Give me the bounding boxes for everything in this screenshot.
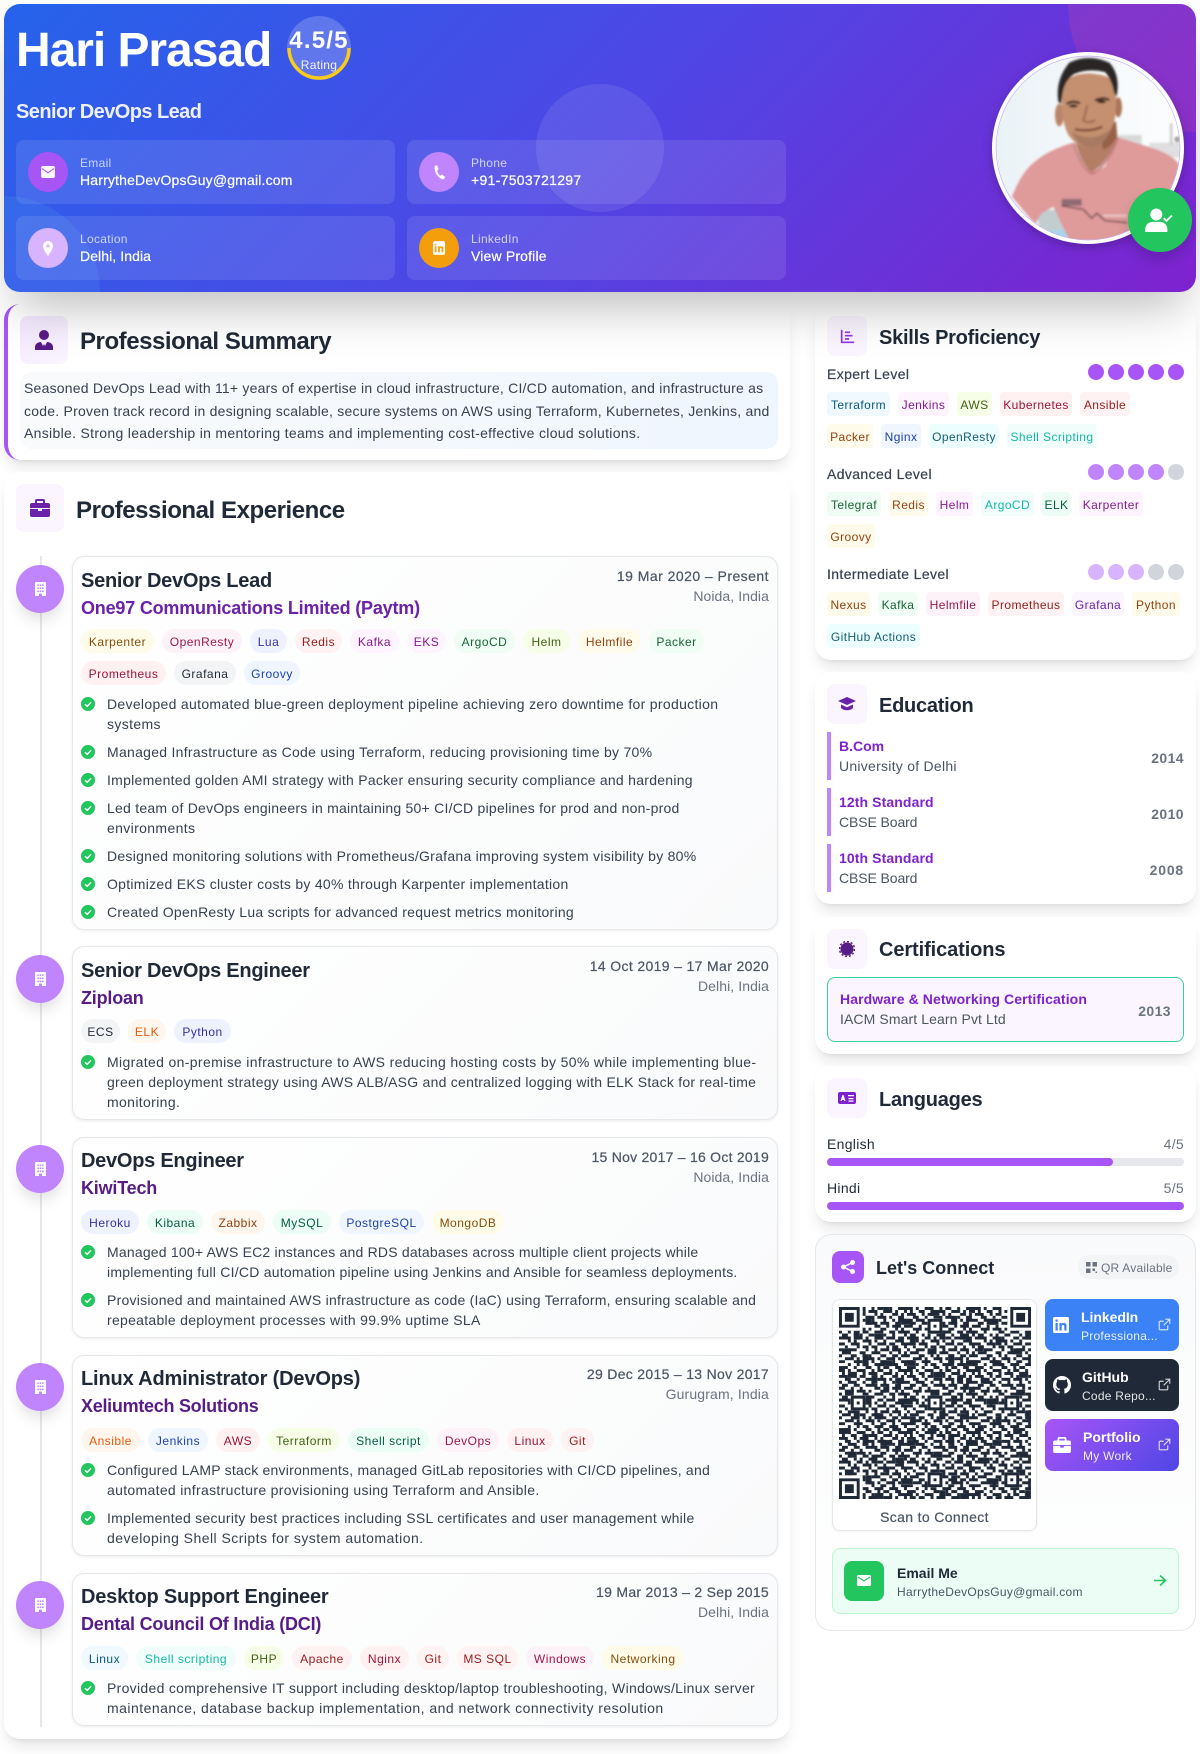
timeline node 4 [16, 1363, 64, 1411]
bullet [81, 876, 569, 892]
panel: professional experience [4, 472, 790, 1739]
tags row: AWS [960, 398, 989, 412]
icon: external link [1158, 1378, 1171, 1391]
email text: HarrytheDevOpsGuy@gmail.com [80, 172, 293, 188]
tags row: Python [1136, 598, 1176, 612]
heading: Education [879, 695, 973, 717]
tags row: Kafka [882, 598, 914, 612]
rating badge: Rating [301, 58, 337, 72]
location: Gurugram, India [666, 1386, 769, 1402]
tags row: OpenResty [170, 635, 234, 649]
location text [80, 232, 151, 264]
achievements: systems [107, 716, 161, 732]
bullet [81, 696, 718, 732]
qr code [839, 1307, 1031, 1499]
job card: Senior DevOps Engineer [72, 946, 778, 1120]
icon: external link [1158, 1318, 1171, 1331]
achievements: Designed monitoring solutions with Prometheus/Grafana improving system visibility by 80% [107, 848, 696, 864]
header banner [4, 4, 1196, 292]
tags row 2 [827, 424, 1097, 448]
tags row: Apache [300, 1652, 344, 1666]
school: CBSE Board [839, 870, 917, 886]
tags row: Packer [656, 635, 697, 649]
tags row: Linux [89, 1652, 120, 1666]
email text: Email [80, 156, 112, 170]
rating badge [287, 16, 351, 80]
tags row: Git [569, 1434, 586, 1448]
verified badge [1128, 188, 1192, 252]
tags row: Terraform [276, 1434, 332, 1448]
job card: DevOps Engineer: Managed 100+ AWS EC2 instances and RDS databases across multiple client projects while [107, 1244, 698, 1260]
qr code card [832, 1299, 1037, 1531]
tags row: PHP [251, 1652, 277, 1666]
qr available chip: QR Available [1101, 1261, 1173, 1275]
tags row: Jenkins [156, 1434, 200, 1448]
profile photo [988, 51, 1188, 252]
bullet [81, 1244, 738, 1280]
tags row 2: Groovy [251, 667, 293, 681]
year: 2013 [1138, 1003, 1171, 1019]
email me button [832, 1548, 1179, 1614]
icon: linkedin [419, 228, 459, 268]
tags row: Ansible [89, 1434, 132, 1448]
icon: briefcase [16, 484, 64, 532]
linkedin text [471, 232, 547, 264]
timeline node 2 [16, 955, 64, 1003]
tags row [81, 1210, 504, 1234]
role: Linux Administrator (DevOps) [81, 1368, 360, 1390]
link subtext: Professiona... [1081, 1329, 1158, 1343]
job card: Linux Administrator: Configured LAMP stack environments, managed GitLab repositories with CI/CD pipelines, and [107, 1462, 710, 1478]
tags row: EKS [414, 635, 439, 649]
issuer: IACM Smart Learn Pvt Ltd [840, 1011, 1006, 1027]
location: Noida, India [693, 1169, 769, 1185]
link subtext: Code Repo... [1082, 1389, 1156, 1403]
tags row: ArgoCD [985, 498, 1030, 512]
score: 4/5 [1164, 1136, 1184, 1152]
summary text: Ansible. Strong leadership in mentoring teams and implementing cost-effective cloud solutions. [24, 425, 640, 441]
link button: GitHub [1045, 1359, 1179, 1411]
bullet [81, 1292, 756, 1328]
education: 10th [827, 844, 1184, 892]
panel: education [815, 672, 1196, 904]
company: Ziploan [81, 988, 144, 1008]
tags row [827, 592, 1180, 616]
degree: 10th Standard [839, 850, 934, 866]
heading: Skills Proficiency [879, 327, 1040, 349]
job card: DevOps Engineer [72, 1137, 778, 1338]
icon: person [20, 316, 68, 364]
tags row: Shell script [356, 1434, 421, 1448]
summary text [20, 372, 778, 449]
tags row [827, 492, 1143, 516]
bullet [81, 848, 696, 864]
bullet [81, 772, 693, 788]
dates: 14 Oct 2019 – 17 Mar 2020 [590, 958, 769, 974]
tags row: Telegraf [831, 498, 877, 512]
tags row: Heroku [89, 1216, 131, 1230]
language: Hindi [827, 1180, 1184, 1210]
heading: Certifications [879, 939, 1005, 961]
dates: 29 Dec 2015 – 13 Nov 2017 [587, 1366, 769, 1382]
tags row: MySQL [281, 1216, 323, 1230]
tags row: Terraform [831, 398, 886, 412]
heading: Let's Connect [876, 1258, 994, 1278]
qr caption: Scan to Connect [880, 1509, 989, 1525]
job card: Desktop Support Engineer: maintenance, database backup implementation, and network connectivity resolution [107, 1700, 664, 1716]
bullet [81, 904, 574, 920]
name: Hari Prasad [16, 24, 271, 77]
icon: linkedin [1053, 1317, 1069, 1333]
tags row 2: Grafana [182, 667, 228, 681]
level dots [1088, 464, 1184, 480]
heading: Professional Summary [80, 328, 331, 355]
timeline node 1 [16, 565, 64, 613]
level label: Advanced Level [827, 466, 932, 482]
phone text: +91-7503721297 [471, 172, 581, 188]
icon: language [827, 1078, 867, 1118]
tags row: PostgreSQL [346, 1216, 417, 1230]
achievements [81, 696, 718, 920]
tags row: Kubernetes [1003, 398, 1069, 412]
icon: bar chart [827, 316, 867, 356]
year: 2008 [1150, 862, 1184, 878]
achievements: Implemented golden AMI strategy with Packer ensuring security compliance and hardening [107, 772, 693, 788]
job card: DevOps Engineer: Provisioned and maintained AWS infrastructure as code (IaC) using Terraform, ensuring scalable and [107, 1292, 756, 1308]
year: 2010 [1151, 806, 1184, 822]
achievements: Optimized EKS cluster costs by 40% through Karpenter implementation [107, 876, 569, 892]
location: Noida, India [693, 588, 769, 604]
tags row: Jenkins [902, 398, 945, 412]
skill level: advanced [826, 464, 1184, 548]
link text: GitHub [1082, 1369, 1129, 1385]
job card: Senior DevOps Engineer: monitoring. [107, 1094, 180, 1110]
contact: linkedin [407, 216, 786, 280]
heading: experience [16, 484, 345, 532]
tags row: Git [425, 1652, 441, 1666]
tags row: Networking [610, 1652, 676, 1666]
skill level: expert [827, 364, 1184, 448]
tags row: Helm [531, 635, 562, 649]
role: Senior DevOps Lead [81, 570, 272, 592]
job card: Linux Administrator: developing Shell Scripts for system automation. [107, 1530, 424, 1546]
role: DevOps Engineer [81, 1150, 244, 1172]
icon: map pin [28, 228, 68, 268]
contact: phone [407, 140, 786, 204]
summary text: code. Proven track record in designing scalable, secure systems on AWS using Terraform, Kubernetes, Jenkins, and [24, 402, 770, 418]
achievements: Managed Infrastructure as Code using Terraform, reducing provisioning time by 70% [107, 744, 652, 760]
label: Email Me [897, 1565, 958, 1581]
bullet [81, 1054, 756, 1110]
name: English [827, 1136, 875, 1152]
tags row [827, 392, 1130, 416]
heading: Languages [879, 1089, 982, 1111]
education: 12th [827, 788, 1184, 836]
tags row [81, 1428, 594, 1452]
panel: professional summary [4, 304, 790, 460]
tags row 2: Nginx [885, 430, 917, 444]
icon: external link [1158, 1438, 1171, 1451]
tags row [81, 629, 704, 653]
location: Delhi, India [698, 978, 769, 994]
certificate card [827, 977, 1184, 1042]
tags row: Helmfile [586, 635, 633, 649]
year: 2014 [1151, 750, 1184, 766]
cert name: Hardware & Networking Certification [840, 991, 1087, 1007]
tags row: MS SQL [463, 1652, 512, 1666]
job card: Linux Administrator: automated infrastructure provisioning using Terraform and Ansible. [107, 1482, 540, 1498]
dates: 15 Nov 2017 – 16 Oct 2019 [592, 1149, 769, 1165]
achievements: Developed automated blue-green deployment pipeline achieving zero downtime for production [107, 696, 718, 712]
icon: graduation cap [827, 684, 867, 724]
job card: DevOps Engineer: implementing full CI/CD automation pipeline using Jenkins and Ansible for seamless deployments. [107, 1264, 738, 1280]
level dots [1088, 364, 1184, 380]
icon: briefcase [1053, 1437, 1071, 1453]
tags row: Shell scripting [145, 1652, 227, 1666]
contact: email [16, 140, 395, 204]
name: Hindi [827, 1180, 860, 1196]
timeline node 5 [16, 1581, 64, 1629]
school: CBSE Board [839, 814, 917, 830]
level bar [827, 1202, 1184, 1210]
level bar [827, 1158, 1184, 1166]
tags row: Linux [514, 1434, 546, 1448]
tags row [81, 1019, 231, 1043]
achievements: environments [107, 820, 195, 836]
panel: certifications [815, 917, 1196, 1054]
tags row: ELK [135, 1025, 159, 1039]
job card: Desktop Support Engineer: Provided comprehensive IT support including desktop/laptop troubleshooting, Windows/Linux server [107, 1680, 755, 1696]
tags row [81, 1646, 684, 1670]
score: 5/5 [1164, 1180, 1184, 1196]
arrow [1153, 1574, 1167, 1587]
panel: skills proficiency [815, 304, 1196, 660]
job headline: Senior DevOps Lead [16, 101, 201, 123]
link text: Portfolio [1083, 1429, 1141, 1445]
linkedin text: LinkedIn [471, 232, 519, 246]
bullet [81, 800, 680, 836]
tags row: Karpenter [1083, 498, 1139, 512]
tags row: MongoDB [440, 1216, 496, 1230]
tags row 2: OpenResty [932, 430, 996, 444]
dates: 19 Mar 2013 – 2 Sep 2015 [596, 1584, 769, 1600]
job card: Desktop Support Engineer [72, 1573, 778, 1726]
panel: let's connect [815, 1234, 1196, 1631]
skill level: intermediate [827, 564, 1184, 648]
tags row: Grafana [1075, 598, 1121, 612]
tags row 2: Shell Scripting [1010, 430, 1094, 444]
tags row: Kafka [358, 635, 391, 649]
language: English [827, 1136, 1184, 1166]
tags row: Python [182, 1025, 223, 1039]
bullet [81, 744, 652, 760]
tags row: Nexus [830, 598, 867, 612]
panel: languages [815, 1066, 1196, 1222]
tags row: Zabbix [218, 1216, 258, 1230]
icon: github [1053, 1376, 1071, 1394]
summary text: Seasoned DevOps Lead with 11+ years of expertise in cloud infrastructure, CI/CD automation, and infrastructure as [24, 380, 763, 396]
tags row: Ansible [1084, 398, 1126, 412]
link button: LinkedIn [1045, 1299, 1179, 1351]
location text: Location [80, 232, 128, 246]
job card: Senior DevOps Engineer: green deployment strategy using AWS ALB/ASG and centralized logging with ELK Stack for real-time [107, 1074, 756, 1090]
level label: Expert Level [827, 366, 909, 382]
level label: Intermediate Level [827, 566, 949, 582]
address: HarrytheDevOpsGuy@gmail.com [897, 1585, 1083, 1599]
location: Delhi, India [698, 1604, 769, 1620]
degree: B.Com [839, 738, 884, 754]
level dots [1088, 564, 1184, 580]
tags row: Prometheus [992, 598, 1060, 612]
tags row: DevOps [445, 1434, 491, 1448]
role: Desktop Support Engineer [81, 1586, 328, 1608]
bullet [81, 1510, 695, 1546]
tags row: Helmfile [930, 598, 976, 612]
tags row: Helm [940, 498, 969, 512]
link text: LinkedIn [1081, 1309, 1138, 1325]
company: KiwiTech [81, 1178, 157, 1198]
icon: share [832, 1251, 864, 1283]
achievements: Led team of DevOps engineers in maintaining 50+ CI/CD pipelines for prod and non-prod [107, 800, 680, 816]
link subtext: My Work [1083, 1449, 1132, 1463]
company: One97 Communications Limited (Paytm) [81, 598, 420, 618]
email text [80, 156, 293, 188]
tags row 2: Prometheus [89, 667, 158, 681]
icon: badge [827, 929, 867, 969]
tags row: Nginx [368, 1652, 401, 1666]
location text: Delhi, India [80, 248, 151, 264]
tags row 2: Packer [830, 430, 870, 444]
dates: 19 Mar 2020 – Present [617, 568, 769, 584]
bullet [81, 1462, 710, 1498]
icon: envelope [844, 1561, 884, 1601]
degree: 12th Standard [839, 794, 934, 810]
phone text [471, 156, 581, 188]
tags row 2: Groovy [830, 530, 872, 544]
tags row: Kibana [155, 1216, 195, 1230]
education: B.Com [827, 732, 1184, 780]
tags row: ECS [87, 1025, 114, 1039]
link button: Portfolio [1045, 1419, 1179, 1471]
icon: phone [419, 152, 459, 192]
job card: Linux Administrator: Implemented security best practices including SSL certificates and user management while [107, 1510, 695, 1526]
tags row: Windows [534, 1652, 586, 1666]
role: Senior DevOps Engineer [81, 960, 310, 982]
tags row 2: GitHub Actions [831, 630, 916, 644]
tags row: Redis [302, 635, 335, 649]
linkedin text: View Profile [471, 248, 547, 264]
company: Dental Council Of India (DCI) [81, 1614, 321, 1634]
job card: Linux Administrator [72, 1355, 778, 1556]
tags row: Lua [258, 635, 279, 649]
icon: envelope [28, 152, 68, 192]
phone text: Phone [471, 156, 507, 170]
tags row: Redis [892, 498, 925, 512]
bullet [81, 1680, 755, 1716]
tags row: ELK [1045, 498, 1068, 512]
contact: location [16, 216, 395, 280]
job card: DevOps Engineer: repeatable deployment processes with 99.9% uptime SLA [107, 1312, 481, 1328]
company: Xeliumtech Solutions [81, 1396, 258, 1416]
tags row: AWS [224, 1434, 252, 1448]
job card: Senior DevOps Engineer: Migrated on-premise infrastructure to AWS reducing hosting costs by 50% while implementing blue- [107, 1054, 756, 1070]
achievements: Created OpenResty Lua scripts for advanced request metrics monitoring [107, 904, 574, 920]
timeline line [40, 556, 42, 1727]
school: University of Delhi [839, 758, 957, 774]
tags row: ArgoCD [462, 635, 507, 649]
title: Professional Experience [76, 497, 345, 524]
tags row 2 [81, 661, 300, 685]
job card: Senior DevOps Lead [72, 556, 778, 930]
timeline node 3 [16, 1145, 64, 1193]
rating badge: 4.5/5 [289, 27, 349, 54]
tags row: Karpenter [89, 635, 146, 649]
qr available chip [1078, 1255, 1179, 1279]
